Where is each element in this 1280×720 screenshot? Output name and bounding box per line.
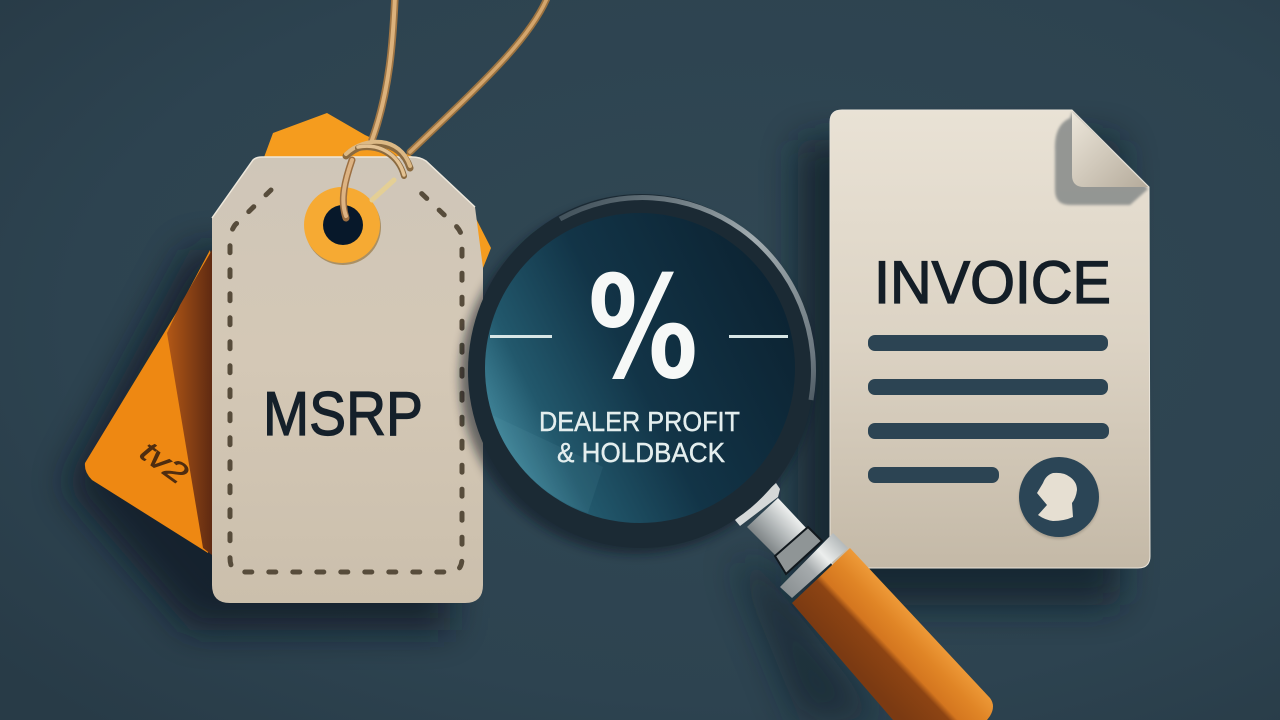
grommet — [304, 187, 381, 265]
invoice line 4 — [868, 467, 999, 483]
rim highlight — [560, 198, 813, 400]
glass — [485, 213, 795, 523]
seal icon — [1019, 457, 1099, 539]
page fold — [1072, 112, 1148, 187]
left rule — [490, 335, 552, 338]
orange grip — [792, 548, 993, 720]
lens text line 2: & HOLDBACK — [557, 437, 725, 468]
percent symbol: % — [588, 246, 698, 411]
neck — [747, 498, 808, 558]
back tag scribble: tv2 — [134, 435, 194, 491]
lens text line 1: DEALER PROFIT — [539, 406, 740, 437]
middle ring — [775, 527, 822, 574]
shadow: handle — [735, 560, 880, 720]
tag stitching — [230, 190, 462, 572]
page fold shadow — [1055, 112, 1148, 205]
shadow: magnifier — [460, 202, 812, 554]
invoice line 1 — [868, 335, 1108, 351]
string ends rising from knot — [372, 0, 548, 152]
magnifier lens — [468, 194, 814, 548]
shadow: invoice — [798, 140, 1120, 605]
panel: invoice document — [830, 110, 1150, 568]
collar near lens — [735, 483, 780, 526]
glass reflection — [492, 415, 603, 513]
seal silhouette — [1037, 473, 1077, 521]
magnifier handle — [735, 483, 993, 720]
invoice line 3 — [868, 423, 1109, 439]
knot and string loops — [343, 142, 410, 218]
invoice line 2 — [868, 379, 1108, 395]
panel: MSRP price tag — [212, 142, 483, 603]
collar near grip — [780, 533, 848, 598]
MSRP label: MSRP — [263, 380, 423, 449]
shadow: tags — [65, 250, 450, 630]
rim — [468, 194, 814, 548]
right rule — [729, 335, 788, 338]
panel: back orange tag — [85, 113, 491, 555]
INVOICE heading: INVOICE — [874, 249, 1111, 316]
